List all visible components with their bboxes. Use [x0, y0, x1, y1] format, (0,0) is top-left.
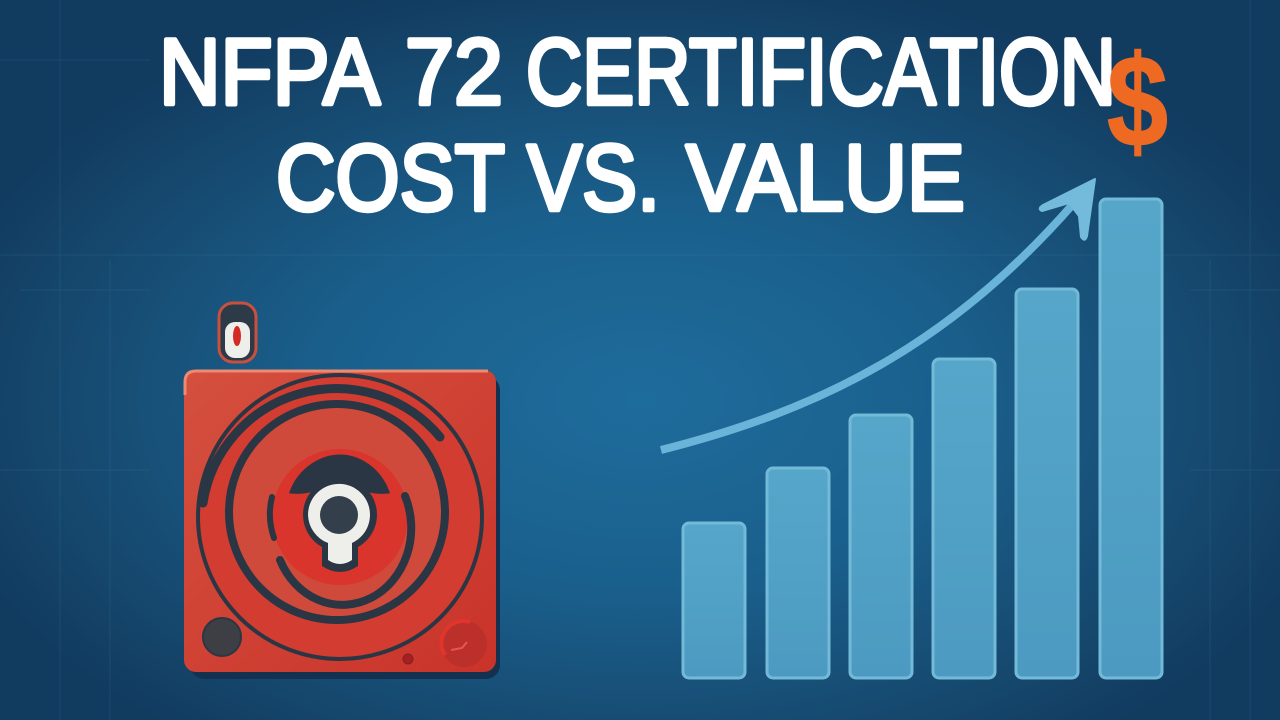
bottom-right knob	[441, 621, 487, 667]
concentric rings	[198, 375, 482, 659]
bar 6	[1100, 199, 1162, 678]
title line 1: NFPA: NFPA	[159, 19, 380, 124]
title line 2: VS.: VS.	[527, 125, 660, 230]
bar 3	[850, 415, 912, 678]
bar 2	[767, 468, 829, 678]
keyhole	[303, 478, 377, 572]
title line 1: CERTIFICATION: CERTIFICATION	[526, 19, 1116, 124]
bar 4	[933, 359, 995, 678]
bottom-left button	[203, 618, 241, 656]
bar 5	[1016, 289, 1078, 678]
icon: fire alarm device	[184, 303, 500, 679]
dark dome	[291, 456, 388, 492]
title line 2: COST: COST	[276, 125, 505, 230]
indicator dot	[403, 654, 413, 664]
title line 2: VALUE: VALUE	[686, 125, 965, 230]
bar chart	[683, 199, 1162, 678]
bar 1	[683, 523, 745, 678]
small indicator switch	[219, 303, 256, 362]
title	[159, 19, 1116, 230]
arrow: upward trend	[661, 179, 1095, 450]
title line 1: 72: 72	[405, 19, 503, 124]
alarm body	[190, 376, 500, 679]
icon: dollar sign: $	[1107, 28, 1168, 174]
